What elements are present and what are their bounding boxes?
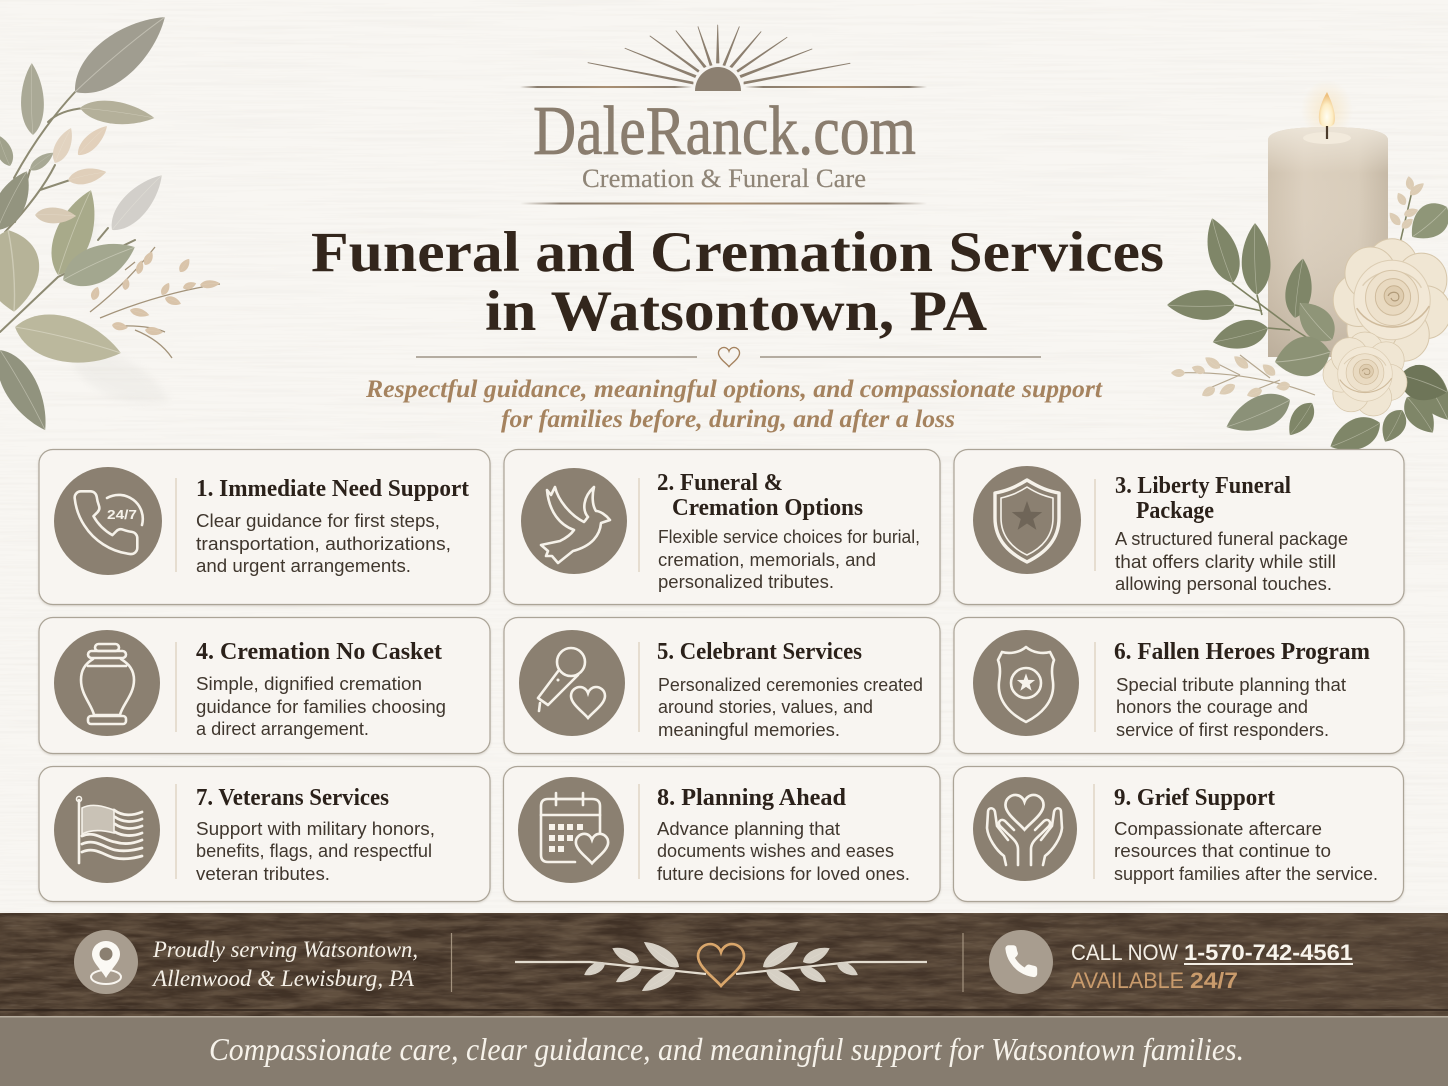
service area	[74, 930, 418, 994]
icon: phone	[989, 930, 1053, 994]
panel: 1. Immediate Need Support	[39, 450, 490, 604]
panel: 2. Funeral & Cremation Options: Cremation Options	[672, 495, 863, 521]
panel: 9. Grief Support: support families after the service.	[1114, 864, 1378, 884]
panel: 7. Veterans Services	[39, 766, 490, 902]
service area: Proudly serving Watsontown,	[152, 937, 418, 962]
panel: 9. Grief Support: resources that continue to	[1114, 841, 1331, 861]
panel: 7. Veterans Services: benefits, flags, and respectful	[196, 841, 432, 861]
panel: 5. Celebrant Services	[504, 618, 940, 754]
panel: 6. Fallen Heroes Program: service of first responders.	[1116, 720, 1329, 740]
panel: 2. Funeral & Cremation Options: personalized tributes.	[658, 572, 834, 592]
logo: DaleRanck.com: Cremation & Funeral Care	[582, 164, 866, 193]
footer band: tagline	[0, 1016, 1448, 1086]
logo: DaleRanck.com	[520, 25, 927, 204]
title: in Watsontown, PA	[485, 280, 987, 343]
subtitle: Respectful guidance, meaningful options, and compassionate support	[365, 376, 1103, 403]
panel: 3. Liberty Funeral Package: A structured funeral package	[1115, 529, 1348, 549]
panel: 5. Celebrant Services: Personalized ceremonies created	[658, 675, 923, 695]
panel: 4. Cremation No Casket: Simple, dignified cremation	[196, 674, 422, 694]
panel: 8. Planning Ahead	[504, 766, 940, 902]
icon: sunrise	[520, 25, 927, 91]
call to action: 24/7	[1190, 968, 1238, 993]
panel: 2. Funeral & Cremation Options: cremation, memorials, and	[658, 550, 876, 570]
call to action: AVAILABLE	[1071, 968, 1184, 993]
panel: 5. Celebrant Services: 5. Celebrant Services	[657, 639, 862, 665]
large rose	[1333, 239, 1448, 361]
panel: 9. Grief Support	[954, 766, 1404, 902]
panel: 1. Immediate Need Support: and urgent arrangements.	[196, 556, 411, 576]
panel: 4. Cremation No Casket: a direct arrangement.	[196, 719, 369, 739]
ornament: heart with branches	[515, 936, 927, 997]
small rose	[1323, 332, 1407, 416]
panel: 4. Cremation No Casket: guidance for families choosing	[196, 697, 446, 717]
call to action: CALL NOW	[1071, 940, 1178, 965]
panel: 5. Celebrant Services: around stories, values, and	[658, 697, 873, 717]
panel: 3. Liberty Funeral Package: 3. Liberty Funeral	[1115, 473, 1291, 499]
panel: 2. Funeral & Cremation Options: Flexible service choices for burial,	[658, 527, 920, 547]
panel: 4. Cremation No Casket: 4. Cremation No Casket	[196, 639, 442, 665]
call to action: 1-570-742-4561	[1184, 940, 1353, 965]
panel: 8. Planning Ahead: documents wishes and eases	[657, 841, 894, 861]
panel: 1. Immediate Need Support: 1. Immediate Need Support	[196, 476, 469, 502]
panel: 5. Celebrant Services: meaningful memories.	[658, 720, 840, 740]
icon: dove	[521, 468, 627, 574]
panel: 4. Cremation No Casket	[39, 618, 490, 754]
illustration: candle with roses	[1167, 80, 1448, 460]
candle	[1268, 80, 1388, 357]
panel: 2. Funeral & Cremation Options	[504, 450, 940, 604]
footer band: tagline: Compassionate care, clear guidance, and meaningful support for Watsontown families.	[209, 1031, 1244, 1067]
panel: 3. Liberty Funeral Package: Package	[1136, 498, 1214, 524]
panel: 9. Grief Support: Compassionate aftercare	[1114, 819, 1322, 839]
panel: 8. Planning Ahead: future decisions for loved ones.	[657, 864, 910, 884]
panel: 3. Liberty Funeral Package	[954, 450, 1404, 604]
panel: 8. Planning Ahead: 8. Planning Ahead	[657, 785, 847, 811]
icon: flag	[54, 777, 160, 883]
icon: urn	[54, 630, 160, 736]
icon: calendar with heart	[518, 777, 624, 883]
footer band: dark wood	[0, 913, 1448, 1017]
call to action	[989, 930, 1353, 994]
icon: phone 24/7: 24/7	[107, 507, 137, 522]
divider with heart	[416, 347, 1041, 367]
panel: 7. Veterans Services: veteran tributes.	[196, 864, 330, 884]
panel: 1. Immediate Need Support: Clear guidance for first steps,	[196, 511, 440, 531]
subtitle: for families before, during, and after a loss	[501, 406, 955, 433]
panel: 6. Fallen Heroes Program: Special tribute planning that	[1116, 675, 1346, 695]
panel: 9. Grief Support: 9. Grief Support	[1114, 785, 1275, 811]
title: Funeral and Cremation Services	[311, 221, 1164, 284]
icon: phone 24/7	[54, 467, 162, 575]
panel: 2. Funeral & Cremation Options: 2. Funeral &	[657, 470, 783, 496]
panel: 8. Planning Ahead: Advance planning that	[657, 819, 840, 839]
panel: 7. Veterans Services: Support with military honors,	[196, 819, 435, 839]
panel: 3. Liberty Funeral Package: allowing personal touches.	[1115, 574, 1332, 594]
icon: location pin	[74, 930, 138, 994]
panel: 6. Fallen Heroes Program	[954, 618, 1404, 754]
logo: DaleRanck.com: DaleRanck.com	[533, 93, 916, 170]
icon: hands holding heart	[973, 777, 1077, 881]
panel: 6. Fallen Heroes Program: 6. Fallen Heroes Program	[1114, 639, 1370, 665]
botanical: left leaves	[0, 1, 220, 438]
subtitle	[365, 376, 1103, 433]
panel: 1. Immediate Need Support: transportation, authorizations,	[196, 534, 451, 554]
panel: 7. Veterans Services: 7. Veterans Services	[196, 785, 389, 811]
green leaves	[1167, 195, 1448, 460]
service area: Allenwood & Lewisburg, PA	[151, 966, 415, 991]
icon: microphone and heart	[519, 630, 625, 736]
panel: 3. Liberty Funeral Package: that offers clarity while still	[1115, 552, 1336, 572]
icon: shield	[973, 466, 1081, 574]
panel: 6. Fallen Heroes Program: honors the courage and	[1116, 697, 1308, 717]
title	[311, 221, 1164, 343]
icon: badge	[973, 630, 1079, 736]
